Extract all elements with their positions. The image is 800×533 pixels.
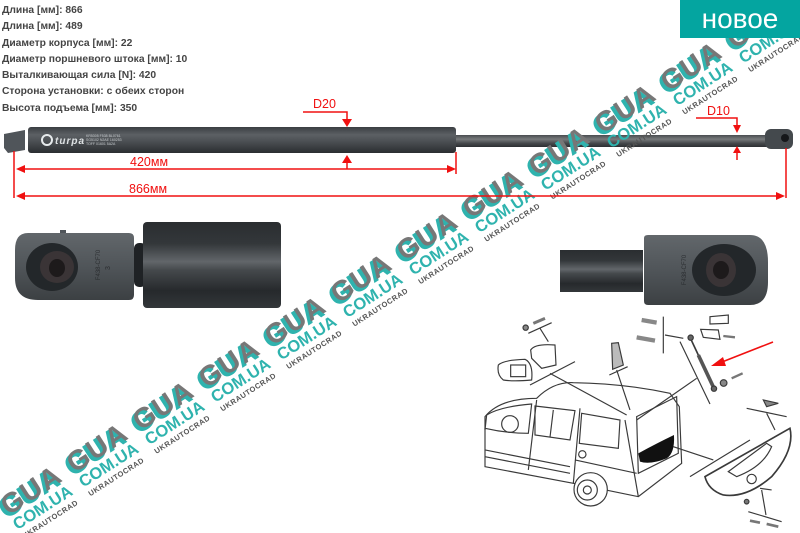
watermark band: COM.UA	[208, 355, 274, 406]
watermark band: GUA	[259, 289, 332, 351]
trim panel	[705, 428, 791, 495]
left end close-up: F438-CF70	[96, 249, 102, 280]
specification list: Выталкивающая сила [N]: 420	[2, 70, 156, 81]
watermark band: COM.UA	[340, 270, 406, 322]
watermark band: COM.UA	[76, 440, 142, 491]
specification list: Диаметр корпуса [мм]: 22	[2, 38, 132, 49]
watermark band: UKRAUTOCRAD	[351, 286, 410, 328]
leader lines	[528, 317, 787, 522]
watermark band: GUA	[193, 332, 266, 394]
watermark band: COM.UA	[10, 482, 76, 533]
fine print on tube: TOFF 01601 5A2A	[86, 142, 116, 146]
watermark band: COM.UA	[670, 58, 736, 110]
red arrow pointer	[722, 342, 773, 362]
watermark band: UKRAUTOCRAD	[615, 116, 674, 159]
watermark band: UKRAUTOCRAD	[285, 328, 344, 371]
right end close-up: F438-CF70	[682, 254, 688, 285]
dimension lines: 866мм	[129, 182, 167, 196]
specification list: Сторона установки: с обеих сторон	[2, 86, 184, 97]
badge: new	[680, 0, 800, 38]
dimension lines: D10	[707, 104, 730, 118]
watermark band: GUA	[191, 335, 264, 397]
fine print on tube: KR5305 F538 BL0761	[86, 134, 121, 138]
watermark band: GUA	[589, 77, 662, 139]
watermark band: UKRAUTOCRAD	[549, 159, 608, 201]
dark panel	[638, 435, 674, 463]
dimension lines: 420мм	[130, 155, 168, 169]
fine print on tube: SG5102 N2AE 160253	[86, 138, 122, 142]
watermark band: GUA	[389, 208, 462, 270]
left end close-up: 3	[105, 266, 112, 270]
watermark band: UKRAUTOCRAD	[219, 371, 278, 413]
watermark band: GUA	[523, 120, 596, 182]
watermark band: COM.UA	[604, 101, 670, 152]
watermark band: UKRAUTOCRAD	[483, 201, 542, 244]
right end close-up	[560, 235, 768, 305]
logo text: turpa	[55, 136, 85, 147]
dimension lines: D20	[313, 97, 336, 111]
specification list: Длина [мм]: 489	[2, 21, 83, 32]
watermark band: GUA	[325, 247, 398, 309]
watermark band: GUA	[391, 204, 464, 266]
watermark band: UKRAUTOCRAD	[153, 413, 212, 456]
vehicle parts diagram	[485, 315, 791, 527]
watermark band: GUA	[653, 38, 726, 100]
badge: new: новое	[702, 3, 778, 34]
watermark band: COM.UA	[274, 313, 340, 364]
watermark band: UKRAUTOCRAD	[417, 244, 476, 286]
specification list: Диаметр поршневого штока [мм]: 10	[2, 54, 187, 65]
watermark band: COM.UA	[406, 228, 472, 279]
watermark band: COM.UA	[472, 185, 538, 237]
specification list: Высота подъема [мм]: 350	[2, 103, 137, 114]
watermark band: GUA	[457, 162, 530, 224]
fine print on tube	[86, 134, 122, 146]
parts	[498, 359, 532, 381]
watermark band: COM.UA	[142, 397, 208, 449]
arrow head	[711, 357, 726, 366]
watermark band: COM.UA	[736, 16, 800, 67]
specification list: Длина [мм]: 866	[2, 5, 83, 16]
watermark band: GUA	[323, 250, 396, 312]
watermark band: GUA	[257, 292, 330, 354]
watermark band: GUA	[125, 377, 198, 439]
watermark band: GUA	[61, 416, 134, 478]
watermark band: COM.UA	[538, 143, 604, 194]
specification list	[2, 5, 187, 114]
gas spring photo: full view	[4, 127, 793, 153]
dimension lines	[14, 97, 786, 200]
watermark band: GUA	[455, 165, 528, 227]
van outline	[485, 383, 682, 506]
watermark band: UKRAUTOCRAD	[681, 74, 740, 116]
watermark band: GUA	[521, 123, 594, 185]
watermark band: GUA	[127, 374, 200, 436]
watermark band: GUA	[587, 80, 660, 142]
left end close-up	[15, 222, 281, 308]
watermark band: GUA	[655, 35, 728, 97]
logo mark	[42, 135, 52, 145]
watermark band: GUA	[59, 420, 132, 482]
watermark band: UKRAUTOCRAD	[87, 456, 146, 498]
